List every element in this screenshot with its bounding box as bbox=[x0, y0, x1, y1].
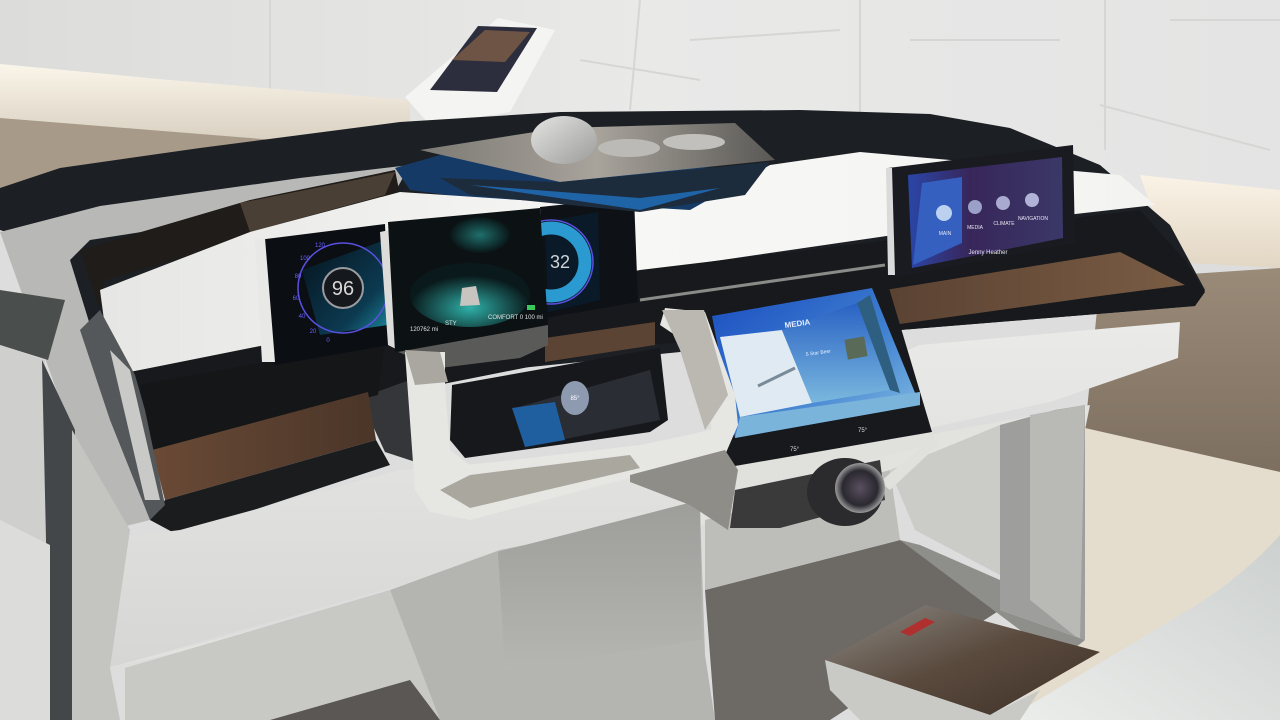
screen bezel bracket bbox=[735, 432, 938, 490]
console cavity bbox=[730, 460, 885, 528]
gauge numbers: 20 bbox=[310, 329, 317, 335]
playlist panel bbox=[782, 303, 890, 403]
center nav screen: STY bbox=[445, 321, 457, 327]
gauge numbers: 80 bbox=[295, 274, 302, 280]
wood trim right bbox=[885, 252, 1185, 326]
control: middle disc bbox=[598, 139, 660, 157]
center nav screen: COMFORT 0 100 mi bbox=[488, 315, 543, 321]
speed readout: 96 bbox=[332, 278, 354, 300]
dashboard: dark glass recess bbox=[80, 170, 400, 310]
dashboard: black brow visor bbox=[0, 110, 1205, 420]
armrest console bbox=[825, 605, 1100, 720]
lower white desk bbox=[100, 322, 1180, 668]
control: right disc bbox=[663, 134, 725, 150]
track title: 5 Star Beer bbox=[805, 348, 832, 358]
dashboard: black lower band bbox=[130, 210, 1205, 440]
screen text: 120762 mi bbox=[410, 327, 438, 333]
carpet left bbox=[270, 680, 440, 720]
speed readout: 32 bbox=[550, 252, 570, 272]
dashboard: teal reflection bbox=[395, 155, 760, 212]
left wood trim bbox=[80, 310, 390, 535]
carpet center bbox=[705, 540, 1000, 720]
gauge numbers: 60 bbox=[293, 296, 300, 302]
center nav screen bbox=[380, 208, 548, 368]
right menu screen bbox=[886, 145, 1075, 277]
top control plate bbox=[420, 116, 775, 212]
dashboard: white top surface bbox=[100, 152, 1155, 372]
desk front edge bbox=[108, 405, 1090, 668]
gauge numbers bbox=[293, 243, 330, 344]
steering yoke bbox=[405, 308, 738, 520]
menu text: MEDIA bbox=[967, 225, 984, 231]
background: floor right light bbox=[1000, 428, 1280, 720]
menu text: CLIMATE bbox=[993, 221, 1015, 227]
left cluster screen bbox=[255, 224, 390, 365]
media label: MEDIA bbox=[784, 317, 811, 330]
screen footer: Jenny Heather bbox=[968, 250, 1008, 256]
temperature right: 75° bbox=[858, 428, 868, 434]
right footwell panel bbox=[705, 405, 1085, 660]
seat bbox=[1005, 535, 1280, 720]
gauge numbers: 100 bbox=[300, 256, 311, 262]
menu text: MAIN bbox=[939, 231, 952, 237]
control: large disc bbox=[531, 116, 597, 164]
menu text bbox=[939, 216, 1048, 237]
yoke display bbox=[450, 348, 668, 458]
gauge numbers: 120 bbox=[315, 243, 326, 249]
map panel bbox=[720, 330, 812, 417]
right cluster screen bbox=[509, 197, 638, 318]
background: glowing strip right bbox=[1140, 175, 1280, 268]
gauge numbers: 0 bbox=[326, 338, 330, 344]
kiosk tablet bbox=[405, 18, 555, 125]
rotary knob bbox=[807, 458, 885, 526]
temperature left: 75° bbox=[790, 447, 800, 453]
menu text: NAVIGATION bbox=[1018, 216, 1048, 222]
left console dark fill bbox=[360, 378, 440, 470]
main media screen bbox=[705, 278, 932, 486]
left pillar bbox=[0, 290, 130, 720]
background: floor left bbox=[0, 118, 300, 190]
background: showroom wall bbox=[0, 0, 1280, 200]
dashboard: grey upper trim bbox=[0, 165, 410, 530]
yoke lower bar bbox=[630, 450, 738, 530]
footwell left bbox=[125, 590, 440, 720]
wood trim center bbox=[545, 322, 655, 362]
gauge numbers: 40 bbox=[299, 314, 306, 320]
background: floor right dark bbox=[1085, 268, 1280, 472]
background: glowing strip left bbox=[0, 64, 410, 142]
yoke text: 85° bbox=[570, 396, 580, 402]
center console column bbox=[390, 500, 715, 720]
